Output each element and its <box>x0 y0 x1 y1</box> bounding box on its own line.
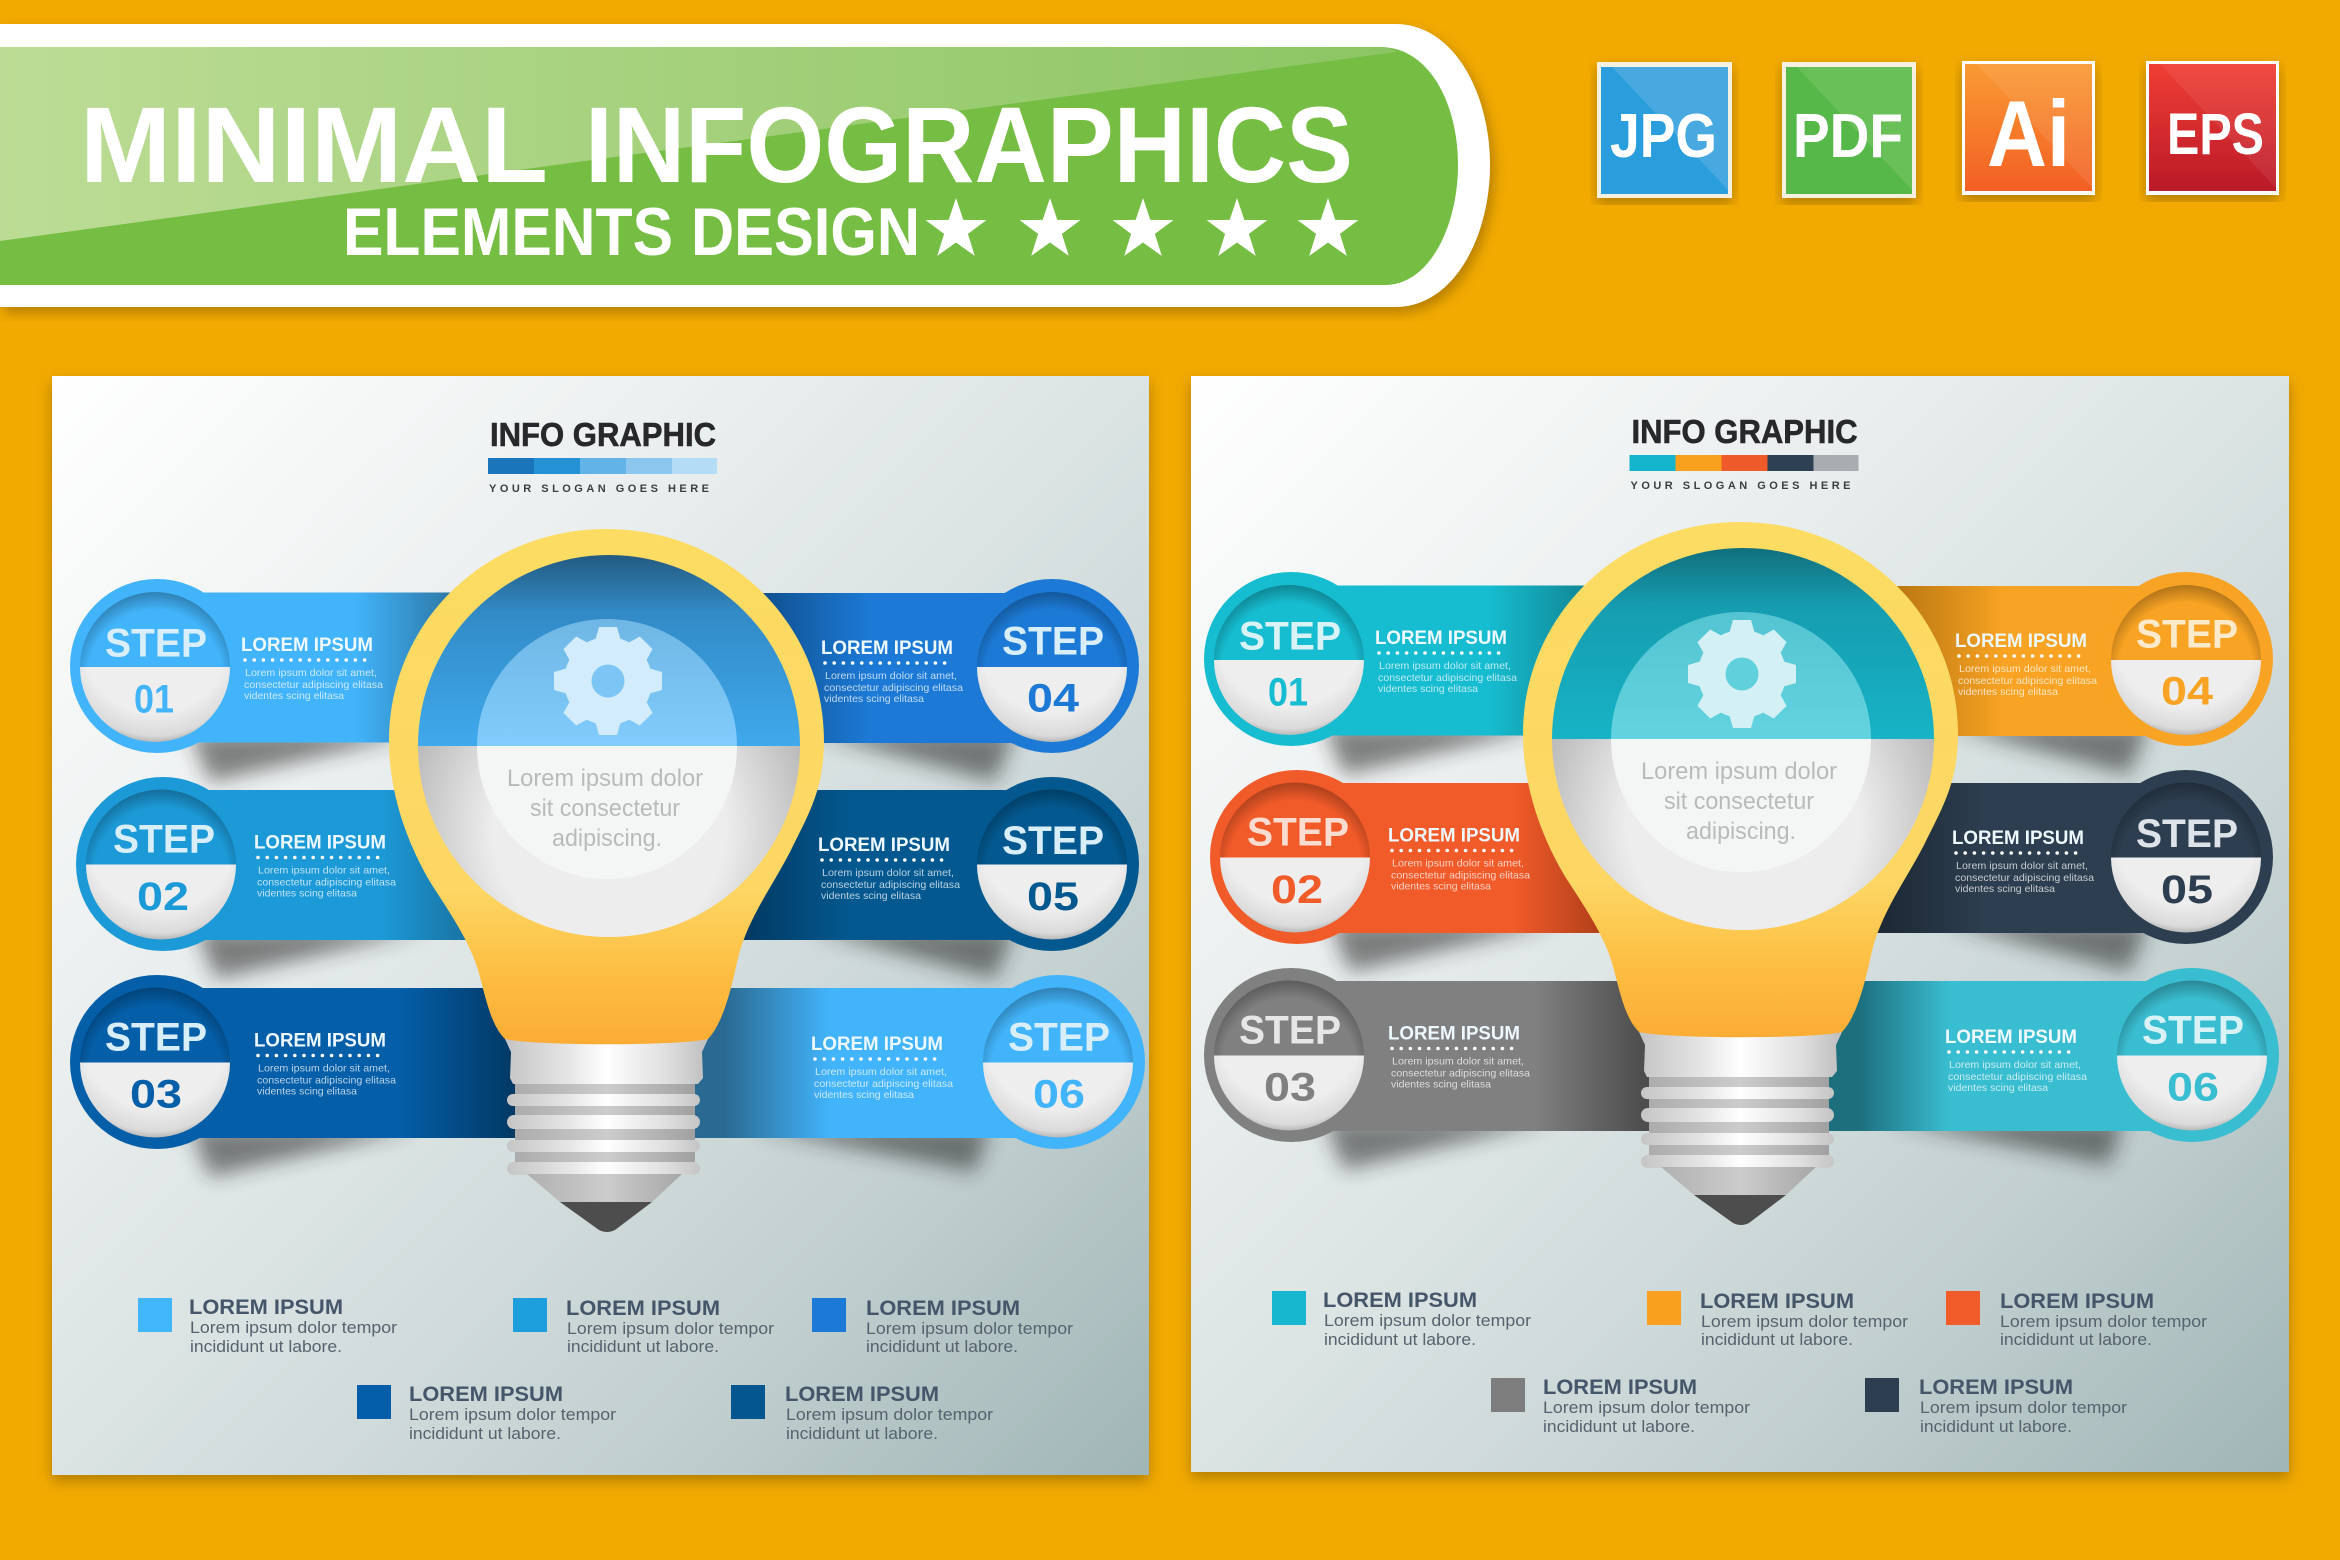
step 02: consectetur adipiscing elitasa <box>1391 870 1530 882</box>
panel: multicolour infographic <box>1191 376 2289 1472</box>
step 03: Lorem ipsum dolor sit amet, <box>258 1062 390 1074</box>
panel contents <box>1204 413 2279 1436</box>
step 03: 03 <box>1264 1066 1316 1110</box>
step 02: videntes scing elitasa <box>1391 880 1491 892</box>
step 02: STEP <box>1247 810 1349 854</box>
step 03: STEP <box>1239 1008 1341 1052</box>
rating stars <box>926 198 1358 256</box>
step 02: 02 <box>1271 868 1323 912</box>
legend: LOREM IPSUM <box>785 1383 939 1406</box>
step 02: Lorem ipsum dolor sit amet, <box>1392 858 1524 870</box>
step 06: 06 <box>2167 1066 2219 1110</box>
panel: blue infographic <box>52 376 1149 1475</box>
heading: INFO GRAPHIC <box>1632 413 1858 450</box>
step 04: STEP <box>2136 612 2238 656</box>
format badge: EPS: EPS <box>2167 102 2264 167</box>
legend: LOREM IPSUM <box>866 1297 1020 1320</box>
panel background <box>1191 376 2289 1472</box>
legend: LOREM IPSUM <box>1543 1376 1697 1399</box>
step 04: 04 <box>2161 670 2214 714</box>
step 01: consectetur adipiscing elitasa <box>1378 672 1517 684</box>
step 01: Lorem ipsum dolor sit amet, <box>1379 660 1511 672</box>
step 02: consectetur adipiscing elitasa <box>257 876 396 888</box>
step 01: videntes scing elitasa <box>244 690 344 702</box>
legend <box>1272 1289 2208 1436</box>
step 04 <box>720 579 1139 753</box>
step 06: consectetur adipiscing elitasa <box>1948 1071 2087 1083</box>
legend: LOREM IPSUM <box>566 1297 720 1320</box>
step 02: Lorem ipsum dolor sit amet, <box>258 864 390 876</box>
step 05: Lorem ipsum dolor sit amet, <box>822 867 954 879</box>
main title: MINIMAL <box>80 84 548 205</box>
legend: incididunt ut labore. <box>409 1425 561 1443</box>
step 02: STEP <box>113 818 215 862</box>
step 05: consectetur adipiscing elitasa <box>1955 872 2094 884</box>
format badge: PDF <box>1782 62 1916 198</box>
step 05: consectetur adipiscing elitasa <box>821 879 960 891</box>
legend: LOREM IPSUM <box>1323 1289 1477 1312</box>
step 05: LOREM IPSUM <box>818 835 950 856</box>
step 05: LOREM IPSUM <box>1952 828 2084 849</box>
step 03 <box>70 975 540 1149</box>
step 01: LOREM IPSUM <box>1375 628 1507 649</box>
step 06: videntes scing elitasa <box>1948 1082 2048 1094</box>
light bulb: Lorem ipsum dolor <box>1641 758 1837 785</box>
legend: LOREM IPSUM <box>189 1296 343 1319</box>
legend: Lorem ipsum dolor tempor <box>409 1406 617 1424</box>
legend: incididunt ut labore. <box>1324 1331 1476 1349</box>
step 05: videntes scing elitasa <box>1955 883 2055 895</box>
legend <box>138 1296 1074 1443</box>
step 04: Lorem ipsum dolor sit amet, <box>1959 663 2091 675</box>
step 04: videntes scing elitasa <box>1958 686 2058 698</box>
legend: incididunt ut labore. <box>1920 1418 2072 1436</box>
step 03: STEP <box>105 1016 207 1060</box>
step 04: Lorem ipsum dolor sit amet, <box>825 670 957 682</box>
legend: Lorem ipsum dolor tempor <box>1324 1312 1532 1330</box>
subtitle: ELEMENTS <box>343 194 673 270</box>
light bulb: sit consectetur <box>1664 788 1814 815</box>
step 06: Lorem ipsum dolor sit amet, <box>815 1066 947 1078</box>
legend: Lorem ipsum dolor tempor <box>2000 1313 2208 1331</box>
step 03: consectetur adipiscing elitasa <box>257 1074 396 1086</box>
step 01: STEP <box>1239 614 1341 658</box>
step 02: LOREM IPSUM <box>254 832 386 854</box>
step 03 <box>1204 968 1674 1142</box>
step 06: 06 <box>1033 1072 1085 1116</box>
legend: incididunt ut labore. <box>1543 1418 1695 1436</box>
legend: incididunt ut labore. <box>786 1425 938 1443</box>
title banner <box>0 24 1490 307</box>
step 05: Lorem ipsum dolor sit amet, <box>1956 860 2088 872</box>
step 05 <box>700 777 1139 951</box>
step 03: videntes scing elitasa <box>1391 1078 1491 1090</box>
step 02: 02 <box>137 875 189 919</box>
format badge: JPG: JPG <box>1610 102 1717 171</box>
step 06: LOREM IPSUM <box>811 1034 943 1055</box>
light bulb: adipiscing. <box>1686 818 1796 845</box>
main title <box>80 84 1353 205</box>
legend: LOREM IPSUM <box>2000 1290 2154 1313</box>
legend: incididunt ut labore. <box>2000 1331 2152 1349</box>
step 04: 04 <box>1027 676 1080 720</box>
step 05: STEP <box>2136 812 2238 856</box>
light bulb: sit consectetur <box>530 795 680 822</box>
heading: INFO GRAPHIC <box>490 416 716 453</box>
step 04: LOREM IPSUM <box>821 638 953 659</box>
step 04: LOREM IPSUM <box>1955 631 2087 652</box>
legend: LOREM IPSUM <box>409 1383 563 1406</box>
step 04 <box>1854 572 2273 746</box>
step 02: videntes scing elitasa <box>257 888 357 900</box>
heading <box>488 416 717 495</box>
step 02 <box>1210 770 1647 944</box>
step 05: 05 <box>1027 875 1079 919</box>
step 04: STEP <box>1002 620 1104 664</box>
step 06: consectetur adipiscing elitasa <box>814 1078 953 1090</box>
subtitle: DESIGN <box>691 194 920 270</box>
legend: Lorem ipsum dolor tempor <box>786 1406 994 1424</box>
legend: incididunt ut labore. <box>567 1338 719 1356</box>
banner highlight <box>0 47 1397 241</box>
legend: Lorem ipsum dolor tempor <box>1920 1399 2128 1417</box>
legend: Lorem ipsum dolor tempor <box>1701 1313 1909 1331</box>
legend: LOREM IPSUM <box>1700 1290 1854 1313</box>
banner white pill <box>0 24 1490 307</box>
legend: Lorem ipsum dolor tempor <box>567 1320 775 1338</box>
heading: YOUR SLOGAN GOES HERE <box>489 483 709 495</box>
step 03: LOREM IPSUM <box>1388 1024 1520 1044</box>
step 06: STEP <box>1008 1016 1110 1060</box>
heading <box>1630 413 1858 492</box>
legend: LOREM IPSUM <box>1919 1376 2073 1399</box>
step 01: 01 <box>134 678 174 722</box>
step 06 <box>1814 968 2279 1142</box>
step 03: Lorem ipsum dolor sit amet, <box>1392 1056 1524 1068</box>
step 06: videntes scing elitasa <box>814 1089 914 1101</box>
heading: YOUR SLOGAN GOES HERE <box>1630 480 1850 492</box>
step 05: STEP <box>1002 819 1104 863</box>
light bulb: Lorem ipsum dolor <box>507 765 703 792</box>
banner green pill <box>0 47 1458 285</box>
step 01: videntes scing elitasa <box>1378 683 1478 695</box>
light bulb <box>1523 522 1958 1225</box>
legend: incididunt ut labore. <box>1701 1331 1853 1349</box>
step 01: STEP <box>105 622 207 666</box>
step 06: Lorem ipsum dolor sit amet, <box>1949 1059 2081 1071</box>
subtitle <box>343 194 920 270</box>
step 06 <box>680 975 1145 1149</box>
panel background <box>52 376 1149 1475</box>
format badge: Ai: Ai <box>1987 81 2070 186</box>
main title: INFOGRAPHICS <box>585 84 1353 205</box>
format badge: EPS <box>2146 61 2279 195</box>
step 02: LOREM IPSUM <box>1388 826 1520 846</box>
format badge: JPG <box>1597 62 1732 198</box>
step 04: consectetur adipiscing elitasa <box>1958 675 2097 687</box>
legend: Lorem ipsum dolor tempor <box>1543 1399 1751 1417</box>
format badge: PDF: PDF <box>1793 102 1903 171</box>
legend: incididunt ut labore. <box>866 1338 1018 1356</box>
light bulb <box>389 529 824 1232</box>
legend: incididunt ut labore. <box>190 1338 342 1356</box>
band shadows <box>1324 725 2149 1170</box>
step 03: 03 <box>130 1072 182 1116</box>
step 03: consectetur adipiscing elitasa <box>1391 1068 1530 1080</box>
step 06: STEP <box>2142 1008 2244 1052</box>
step 05 <box>1834 770 2273 944</box>
step 01: 01 <box>1268 670 1308 714</box>
format badge: Ai <box>1962 61 2095 195</box>
band shadows <box>190 732 1015 1177</box>
step 01 <box>1204 572 1634 746</box>
step 06: LOREM IPSUM <box>1945 1027 2077 1048</box>
step 03: LOREM IPSUM <box>254 1030 386 1052</box>
step 01: LOREM IPSUM <box>241 635 373 656</box>
step 01 <box>70 579 500 753</box>
step 05: 05 <box>2161 868 2213 912</box>
step 04: videntes scing elitasa <box>824 693 924 705</box>
step 03: videntes scing elitasa <box>257 1086 357 1098</box>
step 05: videntes scing elitasa <box>821 890 921 902</box>
step 02 <box>76 777 513 951</box>
legend: Lorem ipsum dolor tempor <box>866 1320 1074 1338</box>
step 04: consectetur adipiscing elitasa <box>824 682 963 694</box>
legend: Lorem ipsum dolor tempor <box>190 1319 398 1337</box>
light bulb: adipiscing. <box>552 825 662 852</box>
step 01: Lorem ipsum dolor sit amet, <box>245 667 377 679</box>
step 01: consectetur adipiscing elitasa <box>244 679 383 691</box>
